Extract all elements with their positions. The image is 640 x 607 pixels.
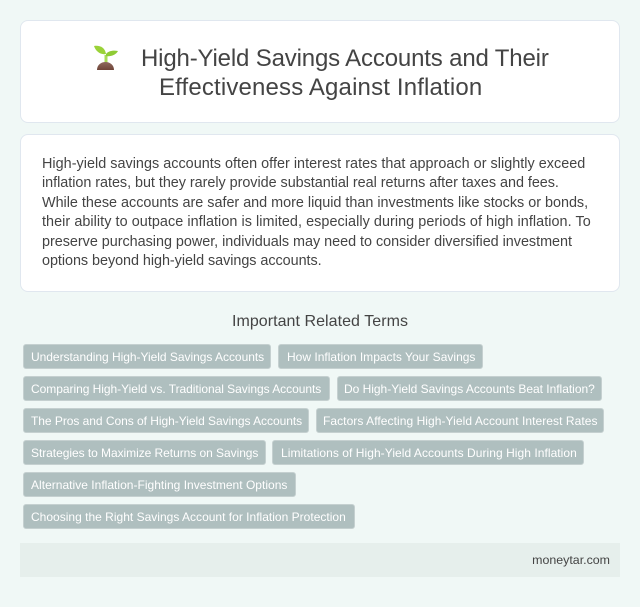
panel: summary card — [20, 134, 620, 292]
footer source: moneytar.com — [532, 553, 610, 567]
tag — [278, 344, 483, 369]
tags: related terms — [23, 344, 604, 529]
summary text: High-yield savings accounts often offer interest rates that approach or slightly exceed — [42, 156, 585, 172]
title — [141, 45, 549, 101]
icon: seedling — [94, 46, 118, 70]
tag — [23, 408, 309, 433]
summary text: options beyond high-yield savings accounts. — [42, 253, 322, 269]
title: High-Yield Savings Accounts and Their — [141, 45, 549, 72]
tag: Comparing High-Yield vs. Traditional Savings Accounts — [31, 382, 321, 396]
title: Effectiveness Against Inflation — [159, 74, 482, 101]
summary text — [42, 156, 591, 269]
tag — [272, 440, 584, 465]
footer bar — [20, 543, 620, 577]
tag: Strategies to Maximize Returns on Savings — [31, 446, 258, 460]
tag: Choosing the Right Savings Account for Inflation Protection — [31, 510, 346, 524]
summary text: their ability to outpace inflation is limited, especially during periods of high inflation. To — [42, 214, 591, 230]
summary text: inflation rates, but they rarely provide substantial real returns after taxes and fees. — [42, 175, 559, 191]
tag — [23, 504, 355, 529]
tag — [316, 408, 604, 433]
tag: The Pros and Cons of High-Yield Savings Accounts — [31, 414, 302, 428]
tag: How Inflation Impacts Your Savings — [287, 350, 475, 364]
tag: Do High-Yield Savings Accounts Beat Inflation? — [344, 382, 595, 396]
summary text: preserve purchasing power, individuals may need to consider diversified investment — [42, 234, 572, 250]
heading: related terms: Important Related Terms — [232, 313, 408, 330]
tag — [23, 344, 271, 369]
summary text: While these accounts are safer and more liquid than investments like stocks or bonds, — [42, 195, 588, 211]
tag: Understanding High-Yield Savings Accounts — [31, 350, 264, 364]
tag: Alternative Inflation-Fighting Investment Options — [31, 478, 287, 492]
tag — [23, 472, 296, 497]
tag — [23, 440, 266, 465]
tag — [337, 376, 602, 401]
panel: title card — [20, 20, 620, 123]
tag: Factors Affecting High-Yield Account Interest Rates — [323, 414, 598, 428]
tag: Limitations of High-Yield Accounts During High Inflation — [281, 446, 577, 460]
tag — [23, 376, 330, 401]
